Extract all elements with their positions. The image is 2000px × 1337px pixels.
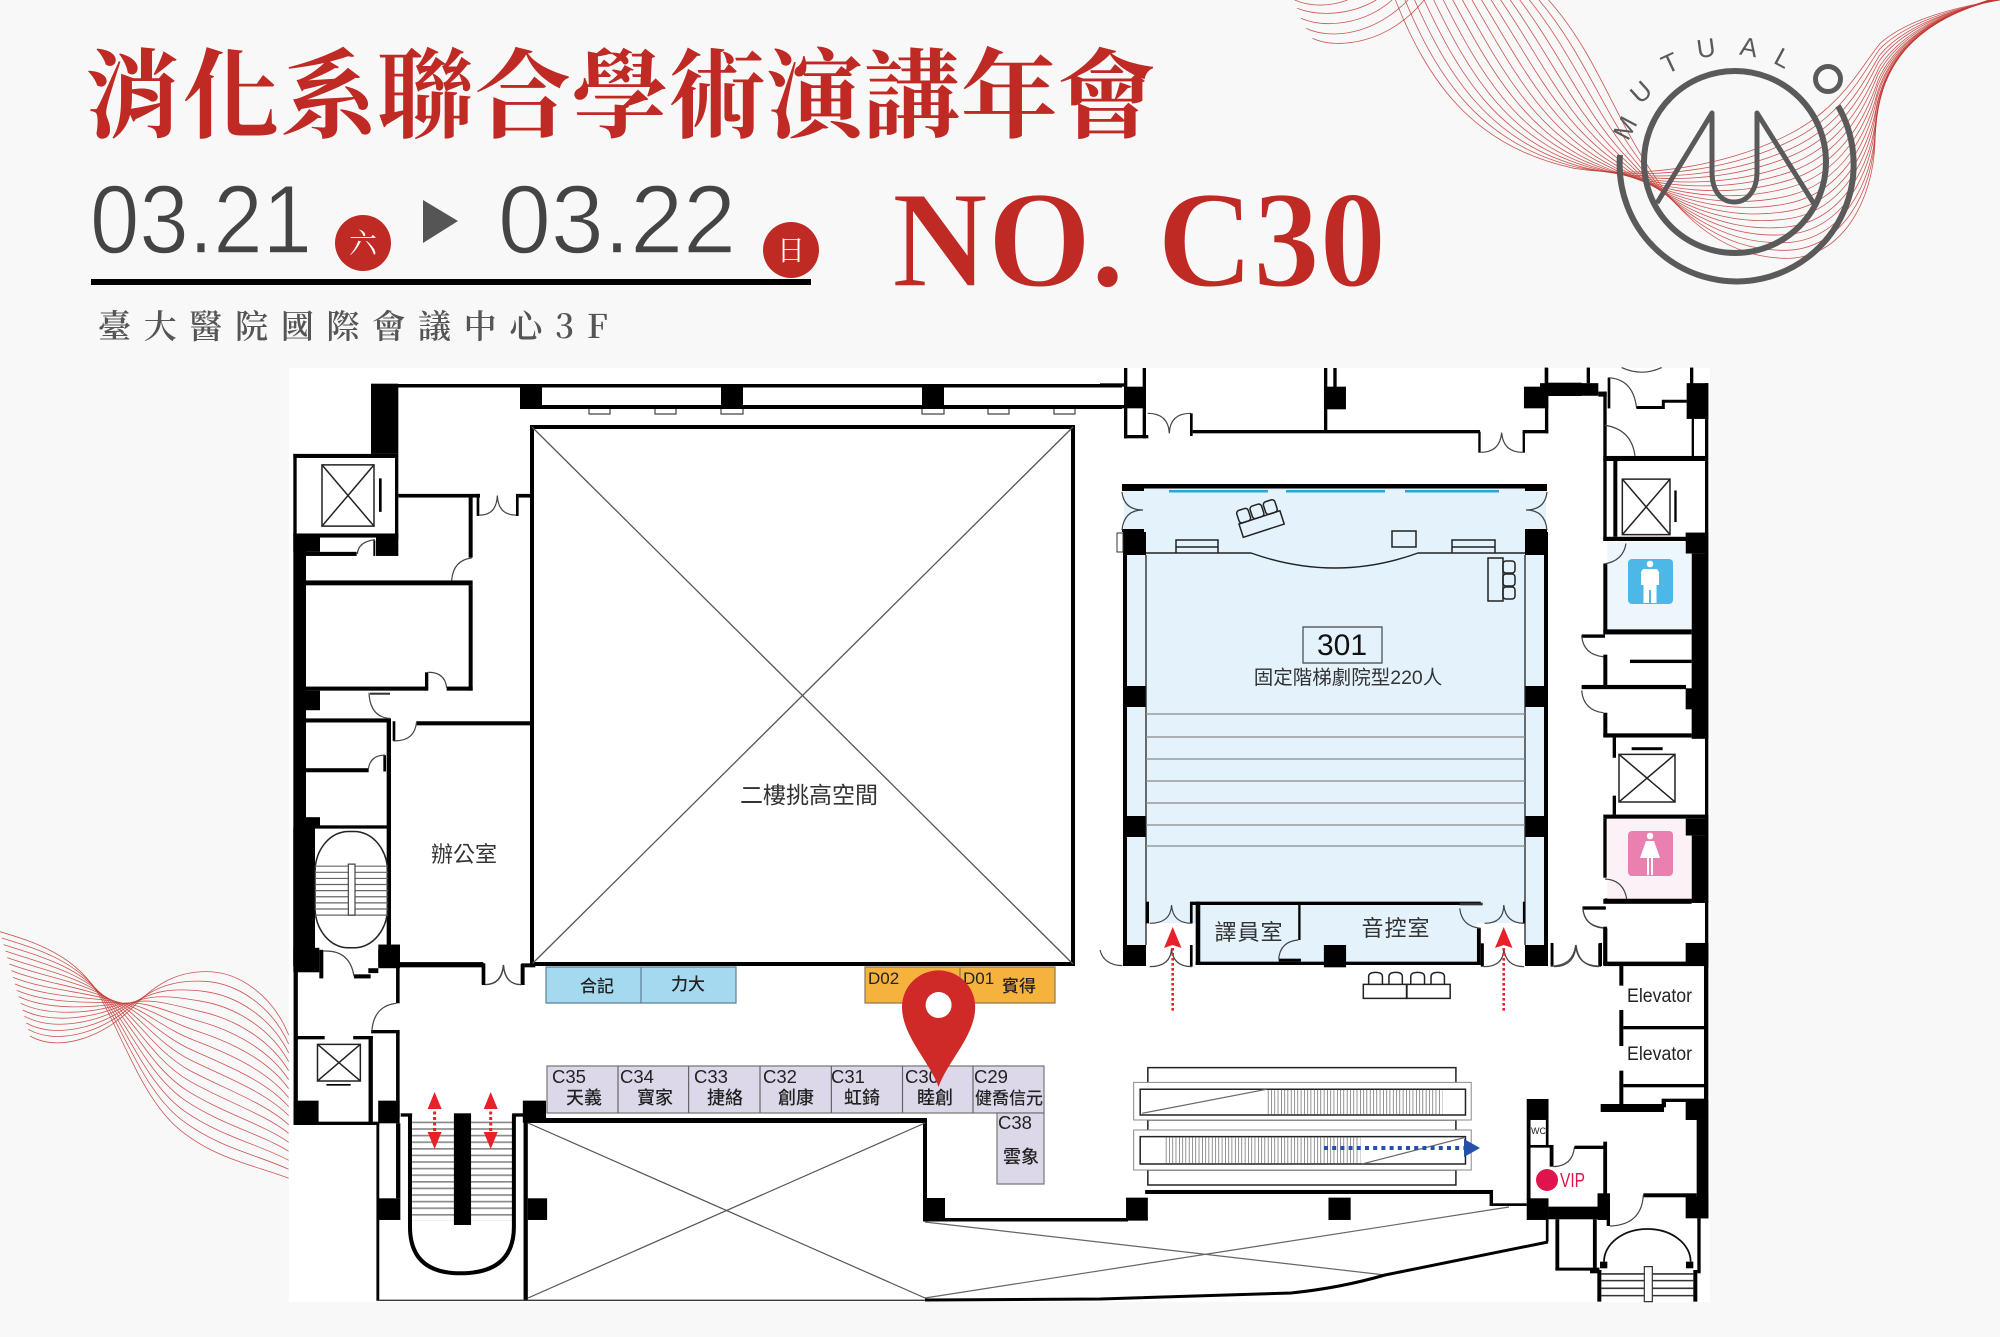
location pin: booth C30	[902, 970, 975, 1087]
badge: saturday	[335, 215, 391, 271]
booths: orange row: D02	[868, 969, 899, 988]
booths: purple row C29-C35 and C38: C29	[974, 1066, 1008, 1087]
booths: orange row: 賓得	[1002, 976, 1036, 996]
label: interpreter room: 譯員室	[1214, 920, 1284, 945]
booth number: NO. C30	[892, 163, 1386, 316]
logo: mutual: A	[1738, 31, 1761, 63]
logo: mutual: M	[1607, 111, 1643, 145]
booths: purple row C29-C35 and C38: C34	[620, 1066, 654, 1087]
booths: purple row C29-C35 and C38: C35	[552, 1066, 586, 1087]
atrium: second-floor void: 二樓挑高空間	[740, 782, 878, 808]
marker: vip room: VIP	[1560, 1170, 1585, 1192]
logo: mutual	[1607, 31, 1854, 281]
booths: purple row C29-C35 and C38: 雲象	[1003, 1147, 1039, 1167]
booths: purple row C29-C35 and C38: C30	[905, 1066, 939, 1087]
label: elevators: Elevator	[1627, 1044, 1693, 1065]
walls: east wing	[1540, 368, 1708, 968]
icon: women's restroom	[1628, 831, 1673, 876]
arrow: escalator direction	[1324, 1139, 1480, 1157]
icon: men's restroom	[1628, 559, 1673, 604]
booths: purple row C29-C35 and C38: 健喬信元	[975, 1089, 1043, 1108]
booths: blue row: 合記	[580, 977, 614, 996]
booths: purple row C29-C35 and C38: 寶家	[637, 1088, 673, 1108]
walls: north-west wing	[293, 384, 531, 985]
walls: hall 301 south, control rooms, escalators	[1100, 898, 1700, 1271]
badge: sunday: 日	[777, 229, 805, 269]
date: end: 03.22	[498, 165, 736, 274]
booths: purple row C29-C35 and C38: 捷絡	[707, 1088, 743, 1108]
title: 消化系聯合學術演講年會	[85, 18, 1155, 158]
label: office: 辦公室	[431, 842, 497, 867]
badge: saturday: 六	[349, 222, 378, 262]
booths: purple row C29-C35 and C38: 虹錡	[844, 1088, 880, 1108]
arrow: date range	[423, 200, 458, 243]
booths: purple row C29-C35 and C38: 天義	[566, 1088, 602, 1108]
walls: south-east wing and entrance stairs	[1590, 943, 1708, 1302]
date: start: 03.21	[90, 165, 312, 274]
logo: mutual: L	[1770, 41, 1796, 75]
booths: blue row	[546, 967, 736, 1003]
walls: corridor south	[528, 1118, 1548, 1300]
walls: north-east corridor	[1100, 368, 1582, 453]
booths: purple row C29-C35 and C38: C33	[694, 1066, 728, 1087]
walls: south-west wing and stairs	[294, 950, 925, 1301]
room: hall 301: 固定階梯劇院型220人	[1254, 667, 1442, 689]
label: wc: WC	[1531, 1126, 1546, 1136]
logo: mutual: U	[1624, 75, 1658, 109]
logo: mutual: U	[1695, 32, 1717, 64]
booths: purple row C29-C35 and C38	[547, 1066, 1044, 1184]
marker: vip room	[1536, 1169, 1585, 1192]
room: hall 301: 301	[1317, 629, 1367, 662]
atrium: second-floor void	[532, 427, 1073, 964]
label: elevators	[1627, 986, 1693, 1065]
booths: orange row	[865, 967, 1055, 1003]
room: hall 301	[1117, 484, 1548, 966]
booths: purple row C29-C35 and C38: C38	[998, 1112, 1032, 1133]
decorative wave: left	[0, 932, 289, 1178]
walls: north gallery	[371, 384, 1122, 414]
label: control room: 音控室	[1361, 916, 1431, 941]
venue: 臺大醫院國際會議中心3F	[98, 301, 608, 348]
booths: orange row: D01	[963, 969, 994, 988]
logo: mutual: T	[1656, 46, 1684, 80]
booths: blue row: 力大	[671, 975, 705, 994]
booths: purple row C29-C35 and C38: 創康	[778, 1088, 814, 1108]
arrows: stairs	[428, 1092, 498, 1149]
booths: purple row C29-C35 and C38: 睦創	[917, 1088, 953, 1108]
date underline	[91, 279, 811, 285]
badge: sunday	[763, 222, 819, 278]
floor plan	[289, 368, 1710, 1302]
decorative wave: top right	[1295, 0, 2000, 258]
booths: purple row C29-C35 and C38: C32	[763, 1066, 797, 1087]
room fill: hall 301	[1124, 486, 1546, 964]
label: elevators: Elevator	[1627, 986, 1693, 1007]
booths: purple row C29-C35 and C38: C31	[831, 1066, 865, 1087]
arrows: entrances to hall 301	[1164, 927, 1512, 1012]
